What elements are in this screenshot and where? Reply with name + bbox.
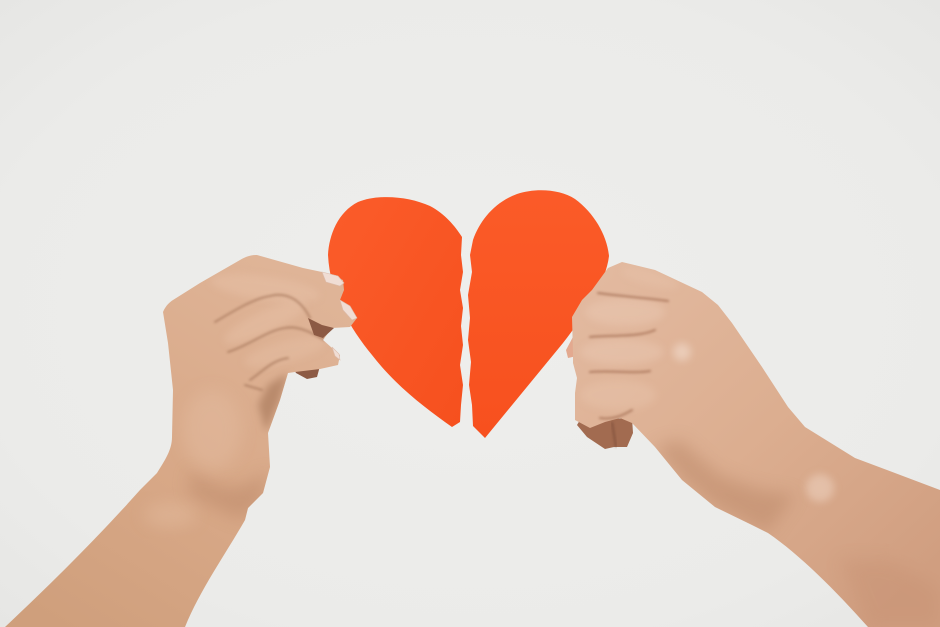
right wrist highlight	[806, 474, 834, 502]
right hand shading	[586, 291, 836, 531]
left upper dark fingertip	[308, 318, 334, 338]
right dark curled fingertips	[577, 418, 633, 449]
left forearm highlight	[154, 507, 186, 524]
right hand and forearm silhouette	[572, 262, 940, 627]
left hand shading	[154, 279, 324, 524]
photo scene: hands tearing a paper heart	[5, 190, 940, 627]
heart: left half	[328, 197, 463, 427]
right hand and arm	[566, 262, 940, 627]
left finger creases	[215, 295, 325, 390]
right hand underside shadow	[655, 440, 795, 533]
left wrist shadow	[191, 478, 266, 517]
left finger highlights	[220, 279, 276, 294]
right forearm shadow	[840, 560, 940, 627]
left inner palm shadow	[258, 373, 288, 432]
left fingernails	[322, 272, 357, 360]
left hand and forearm silhouette	[5, 255, 357, 627]
right fingertip dark gap	[612, 422, 616, 447]
right finger creases	[590, 293, 668, 419]
right knuckle highlight	[673, 343, 691, 361]
right finger highlights	[590, 301, 661, 323]
torn heart	[328, 190, 609, 438]
left lower dark fingertip	[292, 366, 320, 379]
heart: right half	[468, 190, 609, 438]
left hand and arm	[5, 255, 357, 627]
right thumb tip	[566, 335, 577, 358]
